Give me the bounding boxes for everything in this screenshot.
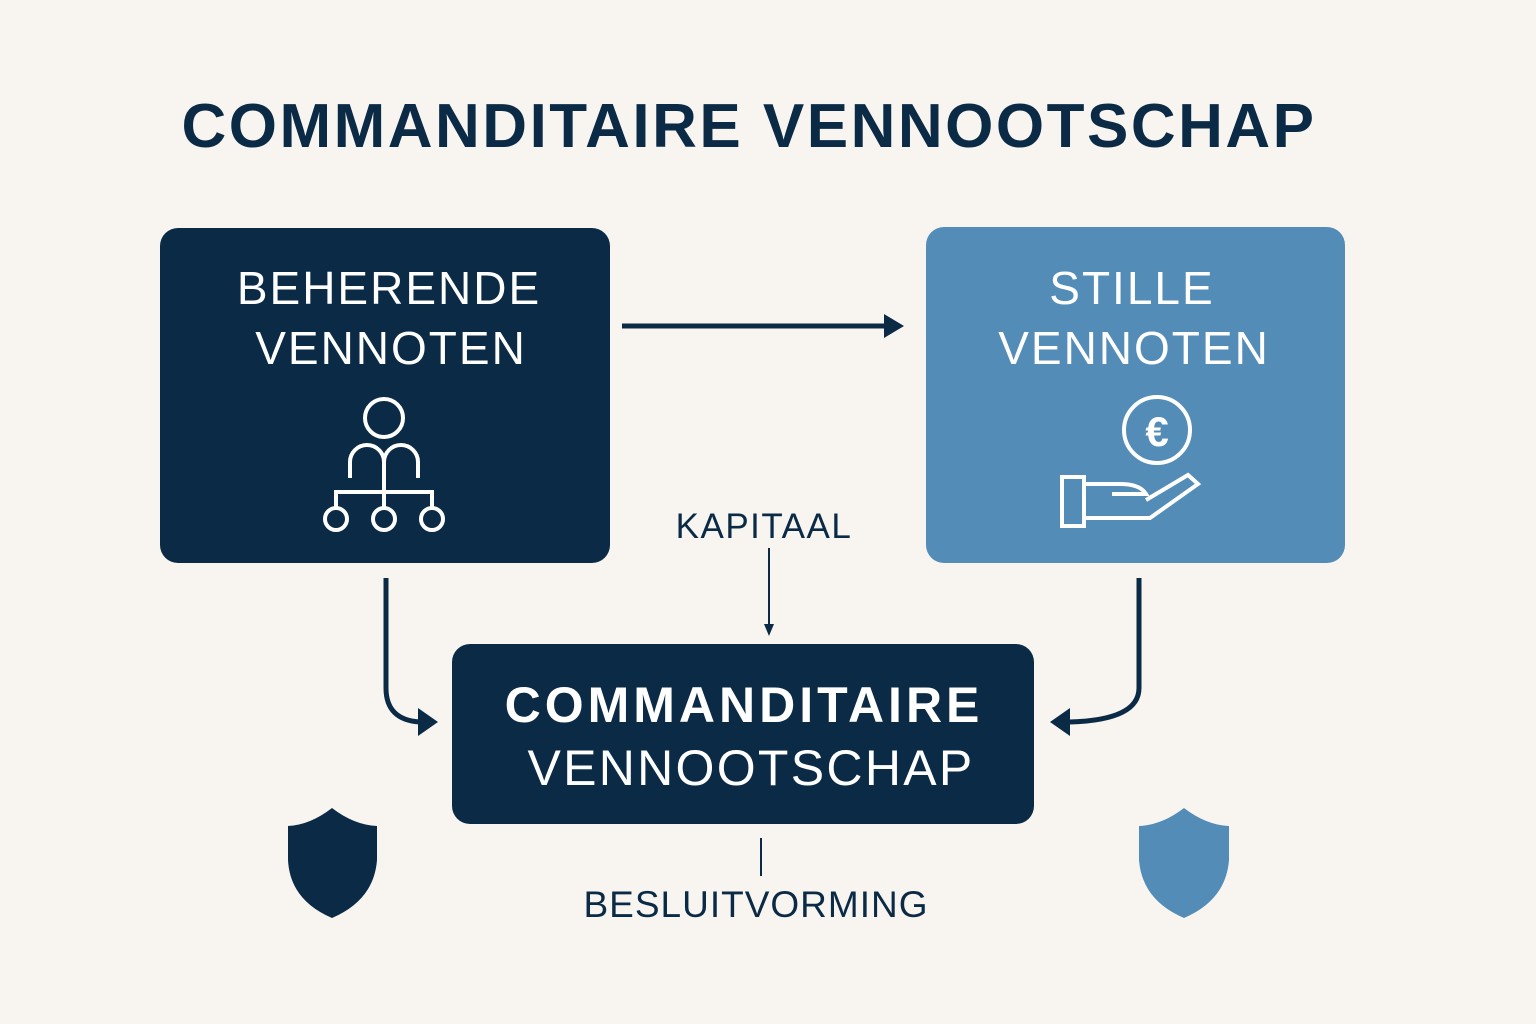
label: kapitaal: KAPITAAL bbox=[676, 507, 852, 546]
title: COMMANDITAIRE VENNOOTSCHAP bbox=[181, 92, 1317, 161]
icon: euro in hand bbox=[1062, 397, 1198, 526]
panel: stille vennoten: STILLE bbox=[1049, 262, 1215, 314]
panel: beherende vennoten: VENNOTEN bbox=[255, 322, 527, 374]
label: besluitvorming: BESLUITVORMING bbox=[584, 884, 928, 925]
panel: stille vennoten: VENNOTEN bbox=[998, 322, 1270, 374]
icon: shield left bbox=[288, 808, 377, 918]
panel: beherende vennoten: BEHERENDE bbox=[237, 262, 541, 314]
icon: organisation people bbox=[325, 399, 443, 530]
panel: stille vennoten bbox=[926, 227, 1345, 563]
icon: shield right bbox=[1139, 808, 1229, 918]
panel: commanditaire vennootschap bbox=[452, 644, 1034, 824]
panel: commanditaire vennootschap: VENNOOTSCHAP bbox=[527, 740, 975, 796]
arrow: kapitaal down bbox=[764, 548, 774, 636]
icon: euro in hand: € bbox=[1145, 408, 1169, 455]
arrow: beherende to stille bbox=[622, 314, 904, 338]
arrow: left into center bbox=[386, 578, 438, 736]
panel: commanditaire vennootschap: COMMANDITAIRE bbox=[505, 677, 983, 733]
panel: beherende vennoten bbox=[160, 228, 610, 563]
arrow: right into center bbox=[1050, 578, 1139, 736]
connector line bbox=[760, 838, 762, 876]
